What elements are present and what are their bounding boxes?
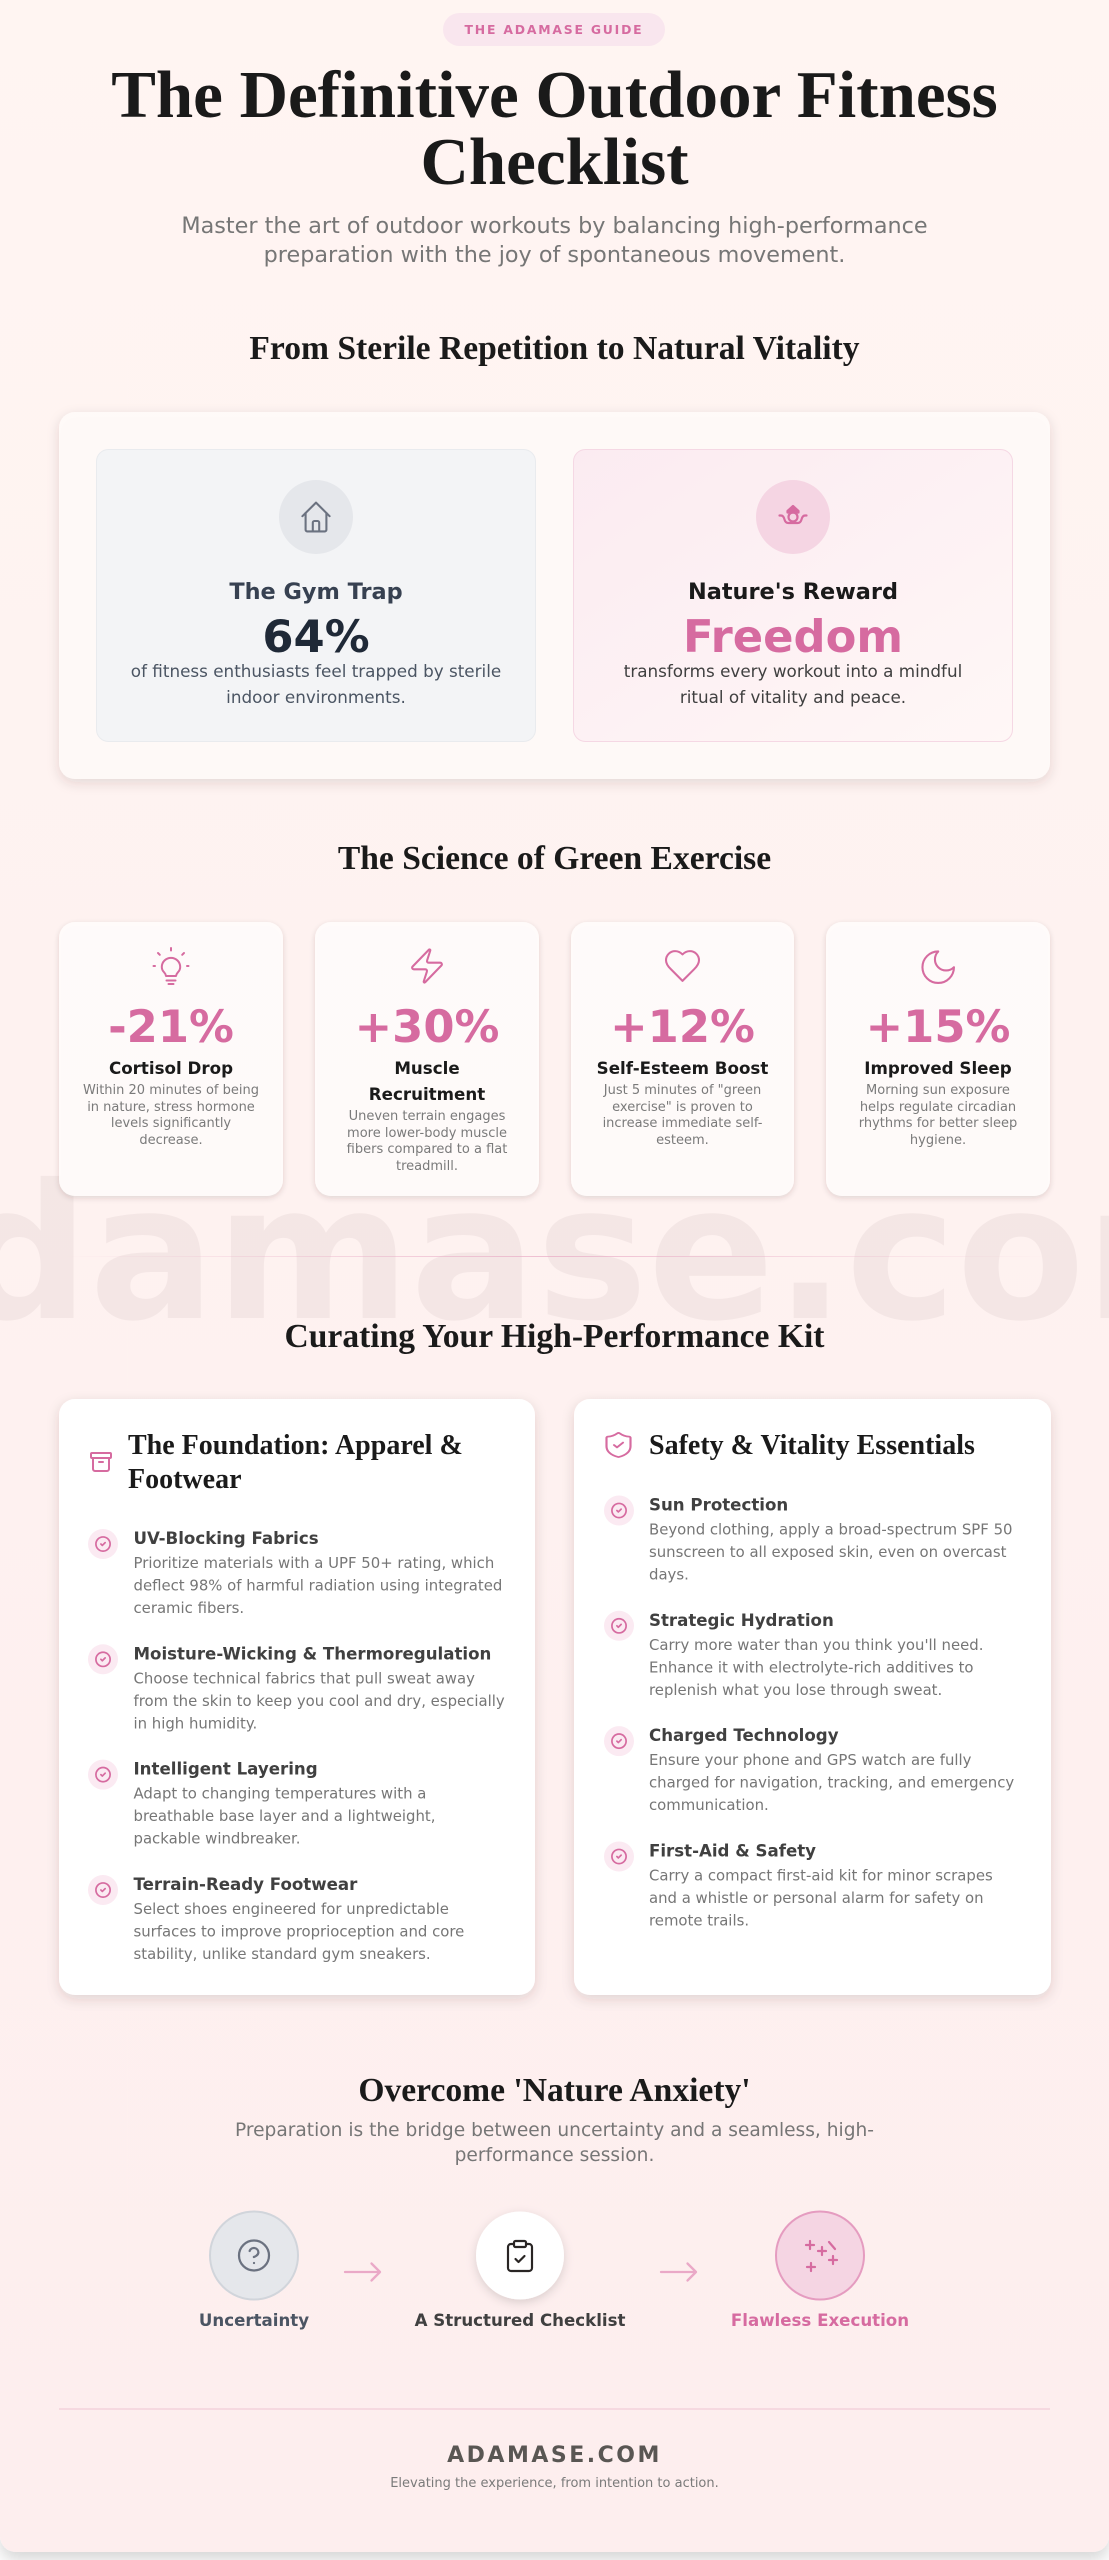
- icon: moon: [922, 951, 954, 983]
- item: hydration: Strategic Hydration: [649, 1611, 834, 1630]
- statistic: Freedom: [683, 610, 903, 663]
- card: the gym trap: [96, 450, 536, 742]
- item: first aid: First-Aid & Safety: [649, 1842, 816, 1860]
- header: [111, 13, 998, 268]
- panel: safety: [574, 1399, 1051, 1995]
- stat: muscle: Muscle: [394, 1058, 460, 1078]
- item: UV: Prioritize materials with a UPF 50+ rating, which: [134, 1554, 494, 1572]
- stat: muscle: more lower-body muscle: [347, 1126, 507, 1141]
- step: uncertainty: Uncertainty: [199, 2311, 309, 2330]
- subtitle: Master the art of outdoor workouts by balancing high-performance: [181, 213, 928, 239]
- item: moisture: from the skin to keep you cool and dry, especially: [134, 1692, 505, 1710]
- stat: sleep: hygiene.: [910, 1133, 966, 1148]
- item: technology: Ensure your phone and GPS watch are fully: [649, 1751, 972, 1769]
- stat: cortisol: [59, 922, 283, 1196]
- stat: sleep: rhythms for better sleep: [859, 1116, 1017, 1131]
- heading: green exercise: The Science of Green Exercise: [338, 840, 771, 877]
- step: checklist: [415, 2212, 625, 2330]
- stat: cortisol: levels significantly: [111, 1116, 231, 1131]
- item: moisture: in high humidity.: [134, 1714, 257, 1732]
- item: footwear: [88, 1875, 464, 1963]
- item: technology: charged for navigation, tracking, and emergency: [649, 1774, 1014, 1792]
- stat: sleep: Morning sun exposure: [866, 1083, 1010, 1098]
- item: sun: [604, 1496, 1012, 1584]
- stat: muscle: fibers compared to a flat: [347, 1142, 507, 1157]
- stat: self-esteem: [571, 922, 794, 1196]
- item: moisture: [88, 1644, 505, 1732]
- footer: [390, 2443, 719, 2491]
- stat: muscle: treadmill.: [396, 1159, 458, 1174]
- footer tagline: Elevating the experience, from intention to action.: [390, 2476, 719, 2491]
- panel heading: The Foundation: Apparel &: [128, 1430, 463, 1461]
- card heading: The Gym Trap: [229, 579, 403, 605]
- card heading: Nature's Reward: [688, 579, 898, 605]
- item: layering: breathable base layer and a lightweight,: [134, 1807, 435, 1825]
- heading: nature anxiety: Overcome 'Nature Anxiety': [358, 2072, 751, 2109]
- arrow: [345, 2264, 380, 2280]
- stat: self-esteem: increase immediate self-: [603, 1116, 763, 1131]
- panel: comparison: [59, 412, 1050, 779]
- item: technology: [604, 1726, 1014, 1814]
- item: layering: Adapt to changing temperatures with a: [134, 1785, 426, 1803]
- stat: sleep: helps regulate circadian: [860, 1100, 1016, 1115]
- stat: self-esteem: Self-Esteem Boost: [597, 1058, 768, 1078]
- card: nature's reward: [574, 450, 1012, 742]
- stat: cortisol: Within 20 minutes of being: [83, 1083, 259, 1098]
- panel: stat cards: [59, 922, 1050, 1196]
- guide badge: [443, 13, 665, 46]
- item: moisture: Choose technical fabrics that pull sweat away: [134, 1669, 475, 1687]
- stat: muscle: Recruitment: [369, 1084, 485, 1104]
- heading: sterile to vitality: From Sterile Repetition to Natural Vitality: [249, 330, 860, 367]
- item: sun: Sun Protection: [649, 1496, 788, 1514]
- item: layering: packable windbreaker.: [134, 1830, 301, 1848]
- item: UV: ceramic fibers.: [134, 1599, 244, 1617]
- stat: cortisol: decrease.: [139, 1133, 203, 1148]
- icon: house: [279, 480, 353, 554]
- item: hydration: Carry more water than you think you'll need.: [649, 1636, 983, 1654]
- stat: cortisol: Cortisol Drop: [109, 1058, 233, 1078]
- panel heading: Safety & Vitality Essentials: [649, 1430, 975, 1461]
- item: hydration: [604, 1611, 983, 1699]
- panel: foundation: [59, 1399, 535, 1995]
- item: sun: days.: [649, 1566, 689, 1584]
- stat: muscle: +30%: [355, 1000, 499, 1053]
- step: uncertainty: [199, 2212, 309, 2330]
- arrow: [661, 2264, 696, 2280]
- item: first aid: and a whistle or personal alarm for safety on: [649, 1889, 984, 1907]
- description: of fitness enthusiasts feel trapped by sterile: [131, 661, 501, 681]
- statistic: 64%: [262, 610, 370, 663]
- stat: muscle: [315, 922, 539, 1196]
- flow diagram: [199, 2212, 909, 2330]
- title: Checklist: [420, 125, 689, 199]
- item: first aid: remote trails.: [649, 1912, 749, 1930]
- stat: self-esteem: +12%: [610, 1000, 755, 1053]
- description: indoor environments.: [226, 687, 406, 707]
- stat: sleep: [826, 922, 1050, 1196]
- stat: sleep: +15%: [866, 1000, 1010, 1053]
- stat: sleep: Improved Sleep: [864, 1058, 1012, 1078]
- item: moisture: Moisture-Wicking & Thermoregulation: [134, 1644, 491, 1663]
- stat: muscle: Uneven terrain engages: [349, 1109, 506, 1124]
- item: sun: sunscreen to all exposed skin, even on overcast: [649, 1543, 1007, 1561]
- subtitle: preparation with the joy of spontaneous movement.: [264, 242, 845, 268]
- item: hydration: Enhance it with electrolyte-rich additives to: [649, 1658, 974, 1676]
- anxiety description: Preparation is the bridge between uncertainty and a seamless, high-: [235, 2120, 874, 2141]
- item: layering: [88, 1760, 435, 1848]
- item: footwear: surfaces to improve proprioception and core: [134, 1922, 464, 1940]
- icon: shield: [606, 1433, 630, 1457]
- stat: self-esteem: esteem.: [656, 1133, 709, 1148]
- stat: self-esteem: exercise" is proven to: [612, 1100, 753, 1115]
- description: ritual of vitality and peace.: [680, 687, 906, 707]
- item: first aid: [604, 1842, 993, 1930]
- item: UV: [88, 1529, 502, 1617]
- panel heading: Footwear: [128, 1464, 242, 1495]
- stat: cortisol: -21%: [108, 1000, 234, 1053]
- item: footwear: Terrain-Ready Footwear: [134, 1875, 358, 1894]
- step: execution: [731, 2212, 909, 2330]
- description: transforms every workout into a mindful: [624, 661, 962, 681]
- item: UV: UV-Blocking Fabrics: [134, 1529, 319, 1548]
- icon: lightbulb: [154, 948, 188, 984]
- icon: heart: [666, 951, 699, 981]
- step: checklist: A Structured Checklist: [415, 2311, 625, 2330]
- item: footwear: stability, unlike standard gym sneakers.: [134, 1945, 431, 1963]
- item: technology: communication.: [649, 1796, 769, 1814]
- stat: cortisol: in nature, stress hormone: [87, 1100, 255, 1115]
- icon: lotus: [756, 480, 830, 554]
- item: technology: Charged Technology: [649, 1726, 839, 1745]
- item: sun: Beyond clothing, apply a broad-spectrum SPF 50: [649, 1520, 1012, 1538]
- item: UV: deflect 98% of harmful radiation using integrated: [134, 1576, 502, 1594]
- guide badge: THE ADAMASE GUIDE: [465, 22, 643, 37]
- heading: kit: Curating Your High-Performance Kit: [285, 1318, 825, 1355]
- step: execution: Flawless Execution: [731, 2311, 909, 2330]
- footer brand: ADAMASE.COM: [447, 2443, 662, 2468]
- anxiety description: performance session.: [455, 2145, 654, 2166]
- stat: self-esteem: Just 5 minutes of "green: [603, 1083, 761, 1098]
- title: The Definitive Outdoor Fitness: [111, 58, 998, 132]
- item: layering: Intelligent Layering: [134, 1760, 318, 1779]
- item: footwear: Select shoes engineered for unpredictable: [134, 1900, 449, 1918]
- icon: lightning: [412, 949, 442, 983]
- item: hydration: replenish what you lose through sweat.: [649, 1681, 942, 1699]
- item: first aid: Carry a compact first-aid kit for minor scrapes: [649, 1866, 993, 1884]
- icon: archive: [91, 1453, 111, 1471]
